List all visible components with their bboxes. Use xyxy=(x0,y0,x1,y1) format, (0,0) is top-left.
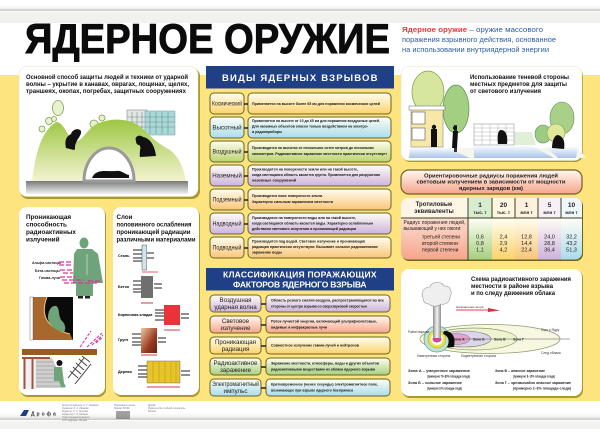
imprint text: Автор-составитель: А. Т. Смирнов xyxy=(62,404,99,407)
row: light radiation xyxy=(210,316,390,333)
row: above water xyxy=(210,213,391,234)
row: radioactive contamination: заражение xyxy=(220,367,252,374)
panel: blast protection xyxy=(19,66,200,199)
heading: half-value layers xyxy=(116,214,196,244)
row: above water: когда светящаяся область касается воды. Характерно ослабленным xyxy=(252,220,373,226)
heading: half-value layers: Слои xyxy=(116,214,133,221)
illustration: ground xyxy=(26,181,188,194)
scheme labels: След облака xyxy=(541,351,561,355)
scheme legend: Зона В – опасное заражение xyxy=(495,368,546,373)
material: soil: Грунт xyxy=(118,338,129,342)
illustration: tunnel xyxy=(84,148,134,181)
illustration: rail grid xyxy=(68,356,91,384)
illustration: bushes xyxy=(535,102,574,149)
row: underwater: радиация практически отсутствуют. Вызывает сильное радиоактивное xyxy=(252,244,379,249)
heading bar: damaging factors: ФАКТОРОВ ЯДЕРНОГО ВЗРЫВА xyxy=(233,280,367,290)
table header: эквиваленты xyxy=(414,209,454,215)
heading: shadow protection: местных предметов для защиты xyxy=(470,81,567,88)
row: radioactive contamination xyxy=(210,358,390,375)
scheme legend: (примерно 2–3% площади следа) xyxy=(513,386,572,390)
scheme labels: Подветренная сторона xyxy=(461,354,496,358)
imprint text: Корректор: Г. И. Мосина xyxy=(62,414,88,416)
mushroom cloud xyxy=(422,282,451,338)
illustration: brick wall xyxy=(474,124,514,145)
row: high altitude: Для наземных объектов опасен только воздействием на электро- xyxy=(252,124,369,128)
row: shock wave: Область резкого сжатия воздуха, распространяющаяся во все xyxy=(271,298,385,302)
table values: 2,4 xyxy=(500,234,507,240)
heading: contamination scheme xyxy=(471,276,571,297)
radiation labels: Гамма-лучи xyxy=(39,276,60,280)
imprint text: Редактор: Л. С. Петрова xyxy=(62,411,89,413)
table title pill: Ориентировочные радиусы поражения людей xyxy=(424,172,558,180)
scheme labels: Район взрыва xyxy=(408,330,429,334)
imprint text: Издательство учебной литературы xyxy=(148,407,186,410)
illustration: trees on hill xyxy=(39,100,105,132)
wind direction arrow xyxy=(456,305,500,312)
imprint text xyxy=(62,404,186,422)
contamination zones: Зона А xyxy=(453,338,465,342)
row: shock wave: Воздушная xyxy=(219,297,252,304)
row: underwater: заражение воды xyxy=(252,250,283,254)
row: underwater: Производится под водой. Световое излучение и проникающая xyxy=(252,238,365,244)
definition text: Ядерное оружие – оружие массового xyxy=(402,25,543,34)
illustration: earth layer xyxy=(22,349,97,355)
scheme legend: (примерно 70–80% площади следа) xyxy=(427,374,470,378)
imprint text: Формат 60×90 xyxy=(114,407,130,410)
panel: contamination scheme xyxy=(401,269,583,398)
row: electromagnetic pulse: Электромагнитный xyxy=(212,381,259,388)
row: above water: Надводный xyxy=(212,220,242,228)
illustration: trees by house xyxy=(412,71,469,152)
heading: blast protection xyxy=(26,73,189,95)
table header: тыс. т xyxy=(497,210,511,215)
heading: shadow protection xyxy=(470,73,569,95)
explosion types list xyxy=(210,93,391,258)
row: light radiation: излучение xyxy=(221,325,251,332)
row: underwater: Подводный xyxy=(212,244,242,252)
heading bar: types of explosions: ВИДЫ ЯДЕРНЫХ ВЗРЫВОВ xyxy=(222,73,378,84)
table values: 1,1 xyxy=(476,248,484,254)
table row labels: вызывающий у них ожоги: xyxy=(404,225,462,232)
material: soil xyxy=(118,328,166,355)
table row labels: третьей степени xyxy=(422,234,460,240)
table header: млн т xyxy=(520,210,533,215)
table header xyxy=(414,202,578,215)
illustration: people in shadow xyxy=(431,125,458,148)
material: brick xyxy=(118,305,189,330)
radiation rays xyxy=(59,262,100,283)
contamination zones: Зона Б xyxy=(473,338,485,342)
table header: млн т xyxy=(565,210,578,215)
row: penetrating radiation xyxy=(210,337,390,354)
table grid lines xyxy=(401,198,582,260)
definition text: на использовании внутриядерной энергии xyxy=(402,45,549,54)
row: electromagnetic pulse: импульс xyxy=(224,388,247,395)
heading: blast protection: Основной способ защиты людей и техники от ударной xyxy=(26,73,188,81)
row: ground: Производится на поверхности земли или на такой высоте, xyxy=(252,166,358,172)
material: steel xyxy=(118,245,158,272)
logo xyxy=(20,410,58,418)
table values: 4,2 xyxy=(500,248,507,254)
imprint text: Москва xyxy=(148,411,157,413)
table row labels: Радиус поражения людей, xyxy=(404,219,466,226)
heading: penetrating radiation: излучений xyxy=(26,236,60,244)
heading: contamination scheme: местности в районе взрыва xyxy=(471,282,553,290)
row: radioactive contamination: Радиоактивное xyxy=(214,360,258,367)
table row labels: второй степени xyxy=(422,240,458,247)
radiation labels: Альфа-частицы xyxy=(32,261,61,265)
scheme legend: (примерно 8–10% площади следа) xyxy=(513,374,555,378)
material: steel: Сталь xyxy=(118,254,130,258)
row: cosmic: Применяется на высоте более 65 км для поражения космических целей xyxy=(252,101,381,106)
row: cosmic xyxy=(210,93,391,114)
panel: penetrating radiation xyxy=(19,207,106,397)
table values: 32,2 xyxy=(566,234,577,240)
logo: Дрофа xyxy=(31,410,58,418)
heading: penetrating radiation: радиоактивных xyxy=(26,229,76,236)
definition text: поражения взрывного действия, основанное xyxy=(402,35,556,44)
row: ground: наземных сооружений xyxy=(252,178,297,182)
table values: 12,8 xyxy=(521,234,532,240)
heading: shadow protection: от светового излучения xyxy=(470,88,541,95)
row: air xyxy=(210,141,391,162)
row: high altitude xyxy=(210,117,391,138)
definition text xyxy=(402,25,556,54)
imprint text: Художник: И. А. Иванова xyxy=(62,407,89,410)
illustration: buildings xyxy=(127,110,175,135)
table values xyxy=(476,234,577,254)
imprint text: Дрофа xyxy=(148,404,156,407)
row: shock wave xyxy=(210,295,390,312)
row: penetrating radiation: Совместное излучение гамма-лучей и нейтронов xyxy=(271,342,360,348)
row: high altitude: Применяется на высоте от 10 до 65 км для поражения воздушных целей. xyxy=(252,118,380,123)
table colored columns xyxy=(468,218,582,260)
illustration: green hill xyxy=(32,120,186,181)
table values: 0,6 xyxy=(476,234,484,240)
table row labels: первой степени xyxy=(422,246,459,254)
row: air: Воздушный xyxy=(212,148,242,156)
table header: 10 xyxy=(568,202,575,209)
heading: half-value layers: проникающей радиации xyxy=(116,229,191,236)
table values: 2,9 xyxy=(500,241,507,247)
heading: half-value layers: половинного ослабления xyxy=(116,222,192,228)
table header: Тротиловые xyxy=(416,202,453,208)
row: shock wave: ударная волна xyxy=(214,304,257,311)
row: shock wave: стороны от центра взрыва со сверхзвуковой скоростью xyxy=(271,304,368,308)
table values: 51,3 xyxy=(566,248,577,254)
heading bar: damaging factors xyxy=(206,268,394,290)
row: above water: действием светового излучения и проникающей радиации xyxy=(252,226,357,231)
damaging factors list xyxy=(210,295,390,396)
row: cosmic: Космический xyxy=(212,100,242,108)
row: underground: Характерно сильным заражением местности xyxy=(252,199,334,204)
row: light radiation: видимые и инфракрасные лучи xyxy=(271,324,328,330)
table row labels xyxy=(404,219,466,254)
radiation labels: Бета-частицы xyxy=(35,269,60,273)
row: above water: Производится на поверхности воды или на такой высоте, xyxy=(252,215,356,220)
table title pill xyxy=(401,170,582,194)
table header: тыс. т xyxy=(473,210,487,215)
imprint text: ООО «Дрофа», Москва xyxy=(62,419,88,422)
scheme legend: Зона Б – сильное заражение xyxy=(408,380,463,385)
row: penetrating radiation: Проникающая xyxy=(215,339,256,346)
scheme labels: Наветренная сторона xyxy=(417,354,450,358)
heading: penetrating radiation xyxy=(26,214,76,244)
material: brick: Кирпичная кладка xyxy=(118,313,153,317)
table values: 22,4 xyxy=(521,248,532,254)
material: concrete xyxy=(118,276,162,303)
explosion area xyxy=(424,326,455,352)
table header cells xyxy=(401,198,582,218)
table title pill: ядерных зарядов (км) xyxy=(459,186,523,192)
table header: 20 xyxy=(500,202,507,209)
table header: 1 xyxy=(525,202,529,209)
row: light radiation: Световое xyxy=(222,318,250,325)
radiation rays lower xyxy=(80,331,103,347)
row: underground: Подземный xyxy=(212,196,242,204)
row: penetrating radiation: радиация xyxy=(222,346,249,353)
row: radioactive contamination: Заражение местности, атмосферы, воды и других объектов xyxy=(271,360,380,366)
scheme labels: Путь к Ядру xyxy=(541,328,560,332)
material: wood xyxy=(118,361,190,387)
heading bar: types of explosions xyxy=(206,66,394,88)
contamination zones: Зона Г xyxy=(513,338,524,342)
scheme legend xyxy=(408,368,572,390)
row: ground xyxy=(210,165,391,186)
table values: 43,2 xyxy=(566,241,577,247)
row: underground xyxy=(210,189,391,210)
row: electromagnetic pulse: возникающее при взрыве ядерного боеприпаса xyxy=(271,388,354,392)
table values: 28,8 xyxy=(544,241,555,247)
table values: 0,8 xyxy=(476,241,484,247)
table header: 1 xyxy=(478,202,482,209)
row: underwater xyxy=(210,237,391,258)
table header: 5 xyxy=(548,202,552,209)
heading: shadow protection: Использование теневой стороны xyxy=(470,73,569,81)
row: underground: Производится ниже поверхности земли. xyxy=(252,193,323,198)
heading: blast protection: траншеях, окопах, погребах, защитных сооружениях xyxy=(26,87,186,95)
title: ЯДЕРНОЕ ОРУЖИЕ xyxy=(25,15,390,62)
row: ground: когда светящаяся область касается грунта. Применяется для разрушения xyxy=(252,172,380,177)
wind direction arrow: Направление ветра xyxy=(456,305,484,309)
row: air: Производится на высотах от нескольких сотен метров до нескольких xyxy=(252,145,375,150)
radiation labels xyxy=(32,261,61,280)
row: high altitude: Высотный xyxy=(212,124,242,132)
illustration: ground shadows xyxy=(408,132,586,158)
heading: penetrating radiation: Проникающая xyxy=(26,214,71,221)
barcode xyxy=(117,411,129,419)
illustration: house xyxy=(409,106,445,147)
table title pill: световым излучением в зависимости от мощности xyxy=(416,180,566,186)
panel: half-value layers xyxy=(113,207,200,397)
contamination zones: Зона В xyxy=(494,338,506,342)
table: radius of damage xyxy=(401,198,583,261)
scheme labels xyxy=(408,328,561,358)
heading: half-value layers: различными материалами xyxy=(116,236,196,244)
row: electromagnetic pulse xyxy=(210,379,390,396)
illustration: protective suit figure xyxy=(73,238,103,298)
table values: 36,4 xyxy=(544,248,555,254)
illustration: shelter section xyxy=(30,297,73,340)
scheme legend: (примерно 10% площади следа) xyxy=(427,386,462,390)
table values: 24,0 xyxy=(544,234,555,240)
scheme legend: Зона А – умеренное заражение xyxy=(408,368,471,373)
illustration: sheltering people xyxy=(65,129,156,157)
material: wood: Дерево xyxy=(118,370,133,374)
imprint text: Ответственный за выпуск xyxy=(62,416,90,419)
scheme legend: Зона Г – чрезвычайно опасное заражение xyxy=(495,380,572,385)
heading: contamination scheme: Схема радиоактивного заражения xyxy=(471,276,571,283)
row: ground: Наземный xyxy=(212,172,242,180)
heading: contamination scheme: и по следу движения облака xyxy=(471,289,555,297)
material: concrete: Бетон xyxy=(118,285,130,289)
heading: penetrating radiation: способность xyxy=(26,220,67,228)
row: radioactive contamination: радиоактивными веществами из облака ядерного взрыва xyxy=(271,366,376,372)
contamination zones xyxy=(420,324,570,354)
table values: 14,4 xyxy=(521,241,532,247)
row: high altitude: и радиоприборы xyxy=(252,129,283,134)
table header: млн т xyxy=(543,210,556,215)
heading: blast protection: волны – укрытие в канавах, оврагах, лощинах, щелях, xyxy=(26,81,189,88)
heading bar: damaging factors: КЛАССИФИКАЦИЯ ПОРАЖАЮЩИХ xyxy=(223,270,377,280)
row: electromagnetic pulse: Кратковременное (менее секунды) электромагнитное поле, xyxy=(271,382,378,386)
row: light radiation: Поток лучистой энергии, включающий ультрафиолетовые, xyxy=(271,318,377,324)
footer publisher info xyxy=(20,404,186,422)
illustration: brick basement xyxy=(22,357,66,389)
panel: shadow protection xyxy=(401,66,586,162)
row: air: километров. Радиоактивное заражение местности практически отсутствует xyxy=(252,151,387,156)
imprint text: Подписано в печать xyxy=(114,405,136,407)
